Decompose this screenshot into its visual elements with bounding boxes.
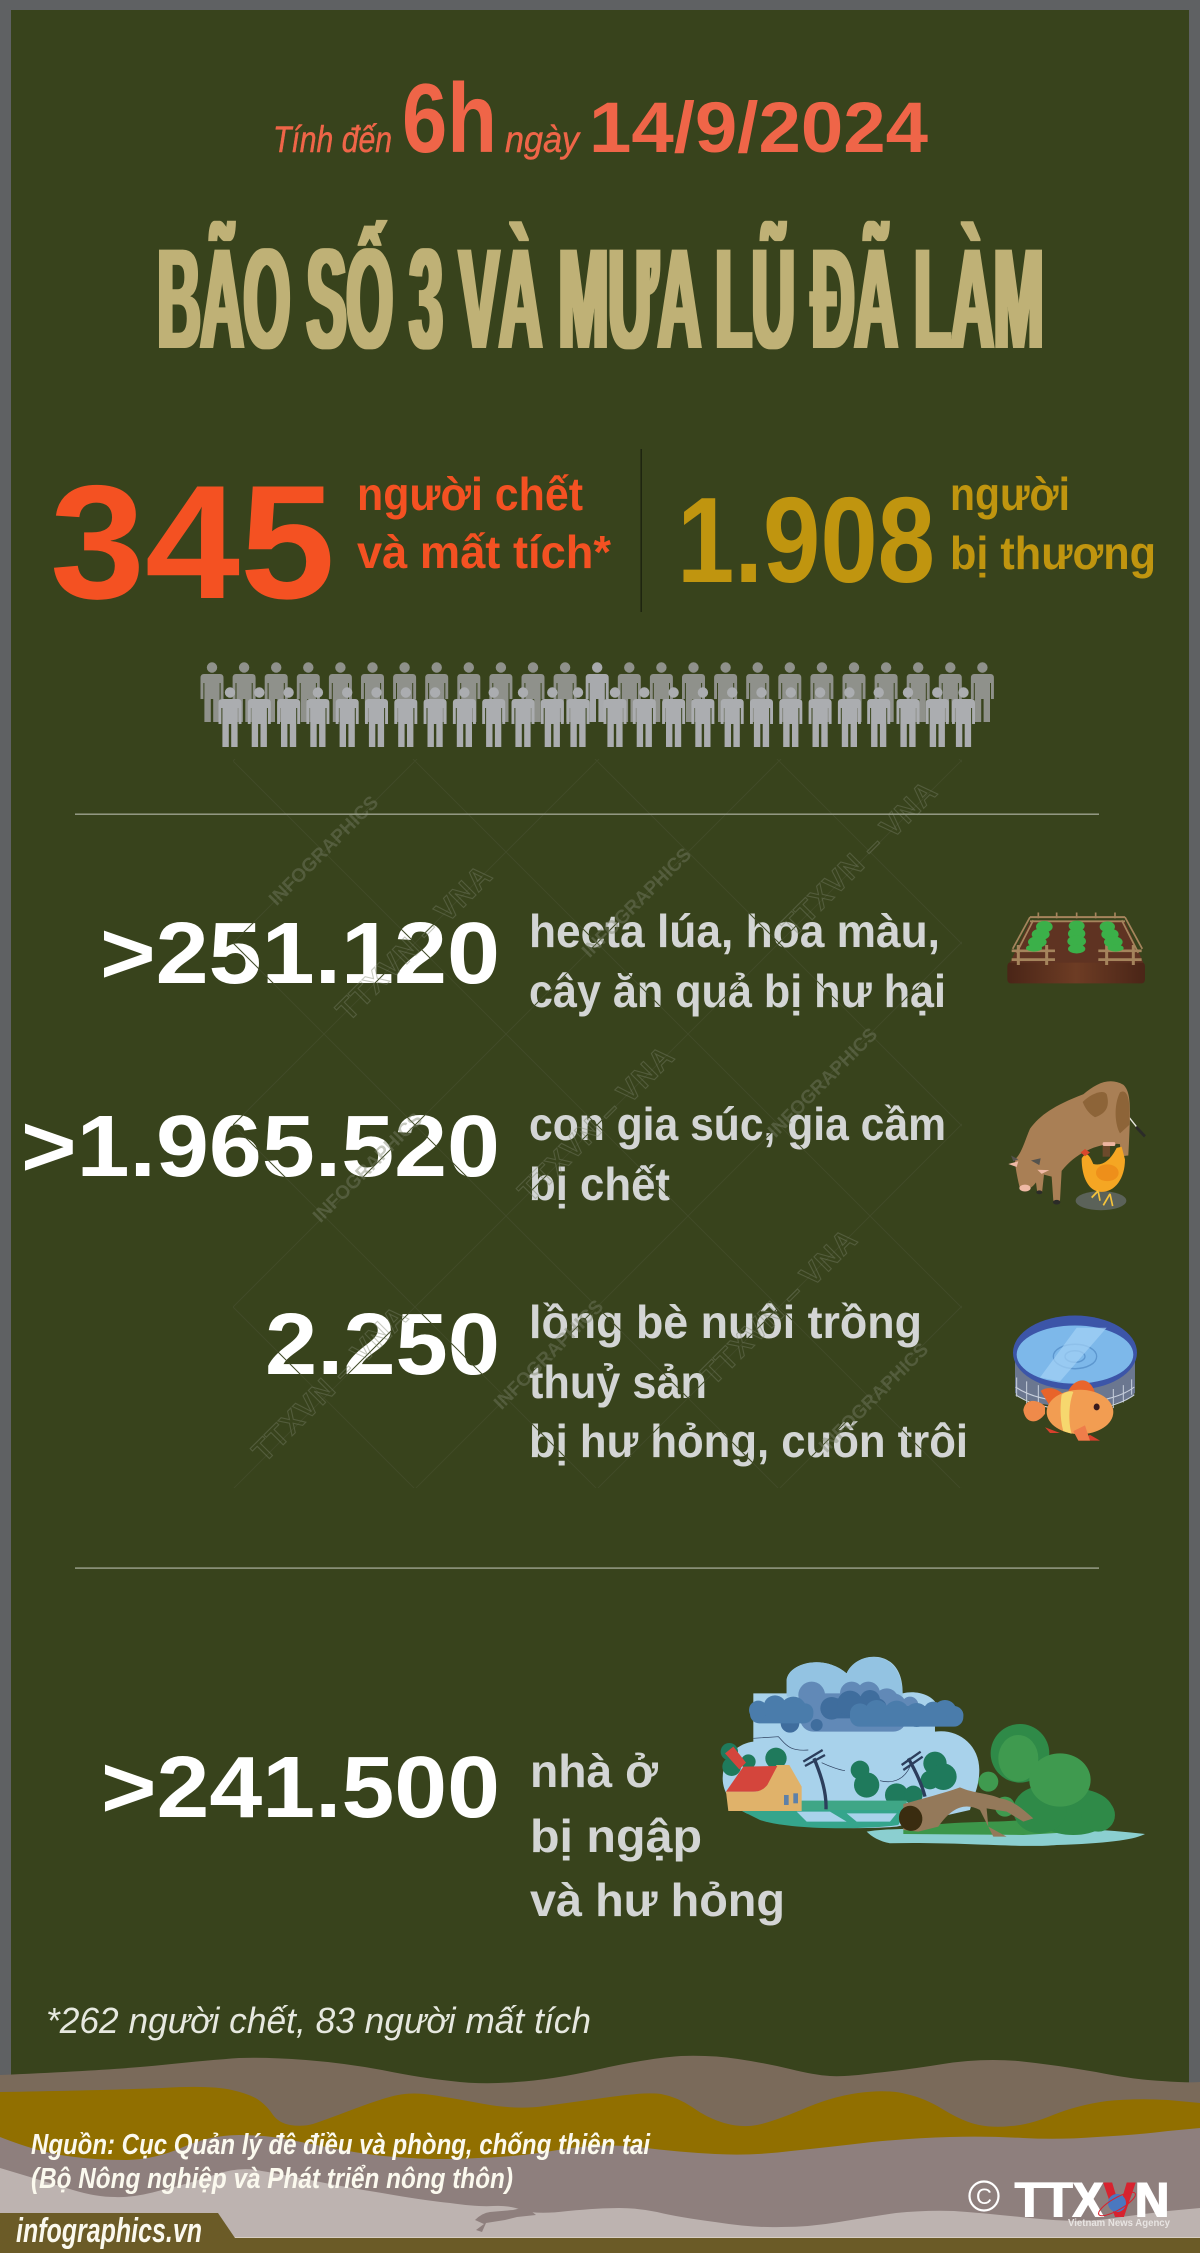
watermark: diamond lattice and agency marks: TTXVN – VNA [695,1223,863,1391]
watermark: diamond lattice and agency marks: INFOGRAPHICS [265,792,383,910]
stat: injured: người [950,468,1070,520]
stat row: houses: bị ngập [530,1810,702,1862]
watermark: diamond lattice and agency marks: TTXVN – VNA [775,775,943,943]
watermark: diamond lattice and agency marks: INFOGRAPHICS [309,1109,427,1227]
icon: crop field [1007,913,1145,983]
watermark: diamond lattice and agency marks: TTXVN – VNA [330,859,498,1027]
stat row: fish cages [265,1296,968,1467]
subtitle: date line: ngày [505,119,581,160]
logo: TTXVN copyright: Vietnam News Agency [1068,2218,1170,2229]
subtitle: date line: 14/9/2024 [589,89,929,168]
stat row: crops: hecta lúa, hoa màu, [529,905,940,957]
icon: rows of people [200,662,994,747]
stat: dead and missing: người chết [357,468,583,520]
watermark: diamond lattice and agency marks: INFOGRAPHICS [578,844,696,962]
watermark: diamond lattice and agency marks: INFOGRAPHICS [815,1339,933,1457]
subtitle: date line: Tính đến [273,119,392,160]
logo: TTXVN copyright: TTXVN [1015,2172,1169,2228]
stat row: houses: nhà ở [530,1745,658,1797]
stat: dead and missing: 345 [50,452,335,633]
footer: layered wave bands [0,2056,1200,2253]
stat row: livestock [21,1098,946,1210]
watermark: diamond lattice and agency marks: TTXVN – VNA [512,1040,680,1208]
watermark: diamond lattice and agency marks: TTXVN – VNA [246,1300,414,1468]
site tab: infographics.vn: infographics.vn [16,2212,202,2250]
stat row: crops [100,905,946,1017]
stat row: houses: và hư hỏng [530,1874,785,1926]
stat row: livestock: >1.965.520 [21,1098,500,1195]
watermark: diamond lattice and agency marks: INFOGRAPHICS [764,1024,882,1142]
stat: injured: bị thương [950,527,1156,579]
stat row: crops: cây ăn quả bị hư hại [529,965,946,1017]
subtitle: date line: 6h [402,63,497,173]
stat: injured [677,468,1156,608]
subtitle: date line [273,63,929,173]
stat row: fish cages: 2.250 [265,1296,500,1393]
stat row: crops: >251.120 [100,905,500,1002]
stat row: houses: >241.500 [101,1739,500,1836]
source note: Nguồn: Cục Quản lý đê điều và phòng, chống thiên tai [31,2129,651,2161]
icon: storm and flood scene [721,1657,1145,1846]
stat: dead and missing: và mất tích* [357,526,611,578]
source note [31,2129,651,2195]
stat row: fish cages: thuỷ sản [529,1356,707,1408]
watermark: diamond lattice and agency marks [233,759,962,1488]
stat: dead and missing [50,452,611,633]
footnote: *262 người chết, 83 người mất tích [46,2000,591,2041]
icon: cow and chicken [1008,1081,1145,1210]
stat row: houses [101,1739,785,1926]
stat row: fish cages: lồng bè nuôi trồng [529,1296,922,1348]
watermark: diamond lattice and agency marks: INFOGRAPHICS [490,1296,608,1414]
source note: (Bộ Nông nghiệp và Phát triển nông thôn) [31,2163,513,2195]
stat: injured: 1.908 [677,472,935,608]
icon: fish cage with clownfish [1013,1316,1137,1441]
stat row: livestock: bị chết [529,1158,670,1210]
stat row: fish cages: bị hư hỏng, cuốn trôi [529,1415,968,1467]
logo: TTXVN copyright: C [976,2184,992,2209]
divider between stats [640,449,642,612]
stat row: livestock: con gia súc, gia cầm [529,1098,946,1150]
